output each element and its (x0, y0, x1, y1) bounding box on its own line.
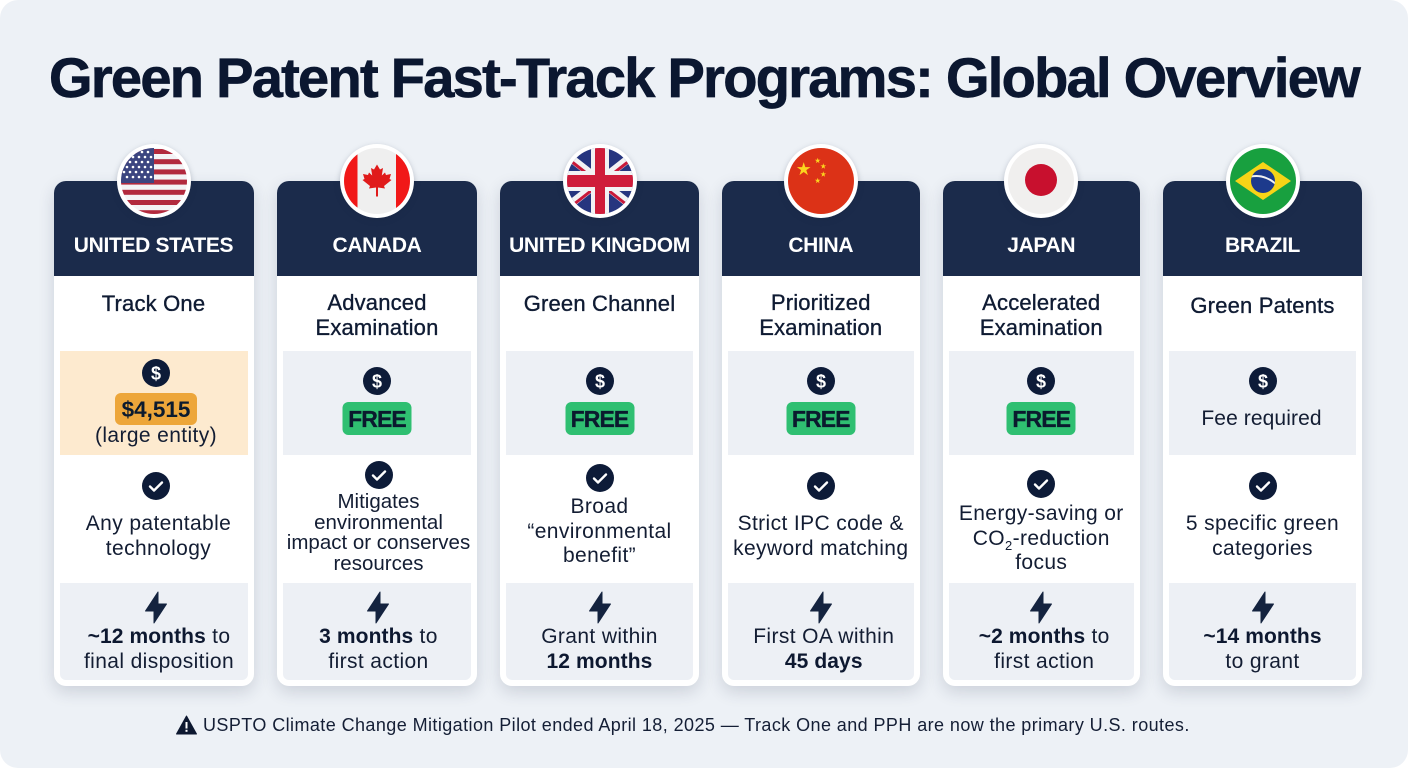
speed panel (728, 583, 914, 680)
eligibility text (1186, 512, 1339, 560)
cost badge (786, 402, 855, 435)
program name (315, 290, 439, 340)
icon: lightning bolt (810, 592, 832, 624)
cost panel (283, 351, 471, 455)
icon: lightning bolt (367, 592, 389, 624)
speed panel (1169, 583, 1356, 680)
eligibility text: “environmental (527, 520, 672, 542)
eligibility text: categories (1212, 536, 1313, 560)
cost panel (506, 351, 693, 455)
eligibility text: Mitigates (337, 490, 420, 513)
speed text: 3 months to (319, 625, 438, 648)
country name: CHINA (788, 234, 853, 257)
icon: dollar: $ (151, 364, 161, 384)
cost panel (60, 351, 248, 455)
footnote text: USPTO Climate Change Mitigation Pilot ended April 18, 2025 — Track One and PPH are now the primary U.S. routes. (203, 715, 1190, 735)
program name: Accelerated (982, 290, 1100, 314)
eligibility text: CO2-reduction (973, 526, 1110, 553)
header: brazil (1163, 181, 1362, 276)
cost note: (large entity) (95, 424, 217, 447)
icon: dollar: $ (372, 372, 382, 392)
eligibility text (86, 512, 231, 560)
icon: dollar (586, 367, 614, 395)
speed text: final disposition (84, 650, 234, 672)
icon: dollar (807, 367, 835, 395)
flag: china (781, 143, 861, 218)
eligibility text (287, 490, 470, 574)
speed text: First OA within (753, 625, 894, 648)
cost badge: FREE (1012, 406, 1070, 432)
eligibility text: environmental (314, 510, 443, 534)
cost panel (948, 351, 1134, 455)
icon: dollar (1249, 367, 1277, 395)
header: japan (942, 181, 1140, 276)
speed text (979, 625, 1110, 672)
flag: japan (1001, 143, 1081, 218)
icon: check (365, 461, 393, 489)
cost badge: $4,515 (122, 397, 190, 422)
icon: dollar (363, 367, 391, 395)
header: canada (277, 181, 477, 276)
eligibility text: keyword matching (733, 536, 908, 560)
speed text: ~2 months to (979, 625, 1110, 648)
icon: dollar: $ (594, 372, 605, 392)
header: china (722, 181, 920, 276)
program name (980, 290, 1103, 340)
eligibility text: 5 specific green (1186, 512, 1339, 535)
speed text (319, 625, 438, 672)
cost badge: FREE (348, 406, 406, 432)
flag: brazil (1223, 143, 1303, 218)
cost badge: FREE (571, 406, 628, 432)
panel: china (722, 181, 920, 686)
eligibility text (733, 512, 908, 560)
cost panel (728, 351, 914, 455)
cost panel (1169, 351, 1356, 455)
speed text: ~14 months (1203, 625, 1322, 648)
icon: lightning bolt (1252, 592, 1274, 624)
eligibility text: Energy-saving or (959, 502, 1124, 525)
speed text (1203, 625, 1322, 672)
country name: CANADA (332, 234, 422, 257)
speed panel (506, 583, 693, 680)
eligibility text (959, 502, 1124, 574)
eligibility text: technology (106, 536, 211, 560)
cost text: Fee required (1201, 407, 1322, 430)
eligibility text (527, 495, 672, 567)
icon: check (1027, 470, 1055, 498)
icon: lightning bolt (589, 592, 611, 624)
program name: Examination (315, 314, 439, 340)
icon: lightning bolt (145, 592, 167, 624)
speed text: Grant within (541, 625, 658, 648)
panel: japan (942, 181, 1140, 686)
panel: brazil (1163, 181, 1362, 686)
country name: BRAZIL (1225, 234, 1300, 257)
icon: warning (176, 716, 197, 734)
icon: check (142, 472, 170, 500)
cost badge (115, 393, 197, 425)
header: united kingdom (500, 181, 699, 276)
speed text: 45 days (785, 650, 863, 672)
icon: dollar: $ (816, 372, 826, 392)
speed text (753, 625, 894, 672)
program name: Green Channel (524, 291, 675, 316)
speed text: first action (328, 650, 429, 672)
flag: united states (114, 143, 194, 218)
icon: check (807, 472, 835, 500)
speed text (84, 625, 234, 672)
icon: dollar: $ (1036, 372, 1046, 392)
eligibility text: focus (1015, 551, 1067, 574)
speed panel (283, 583, 471, 680)
country name: JAPAN (1007, 234, 1075, 257)
program name: Track One (102, 291, 205, 316)
program name (759, 290, 882, 340)
speed text: ~12 months to (88, 625, 230, 648)
program name: Examination (759, 314, 882, 340)
icon: dollar (142, 359, 170, 387)
eligibility text: Broad (571, 495, 628, 518)
panel: canada (277, 181, 477, 686)
icon: check (586, 464, 614, 492)
panel: united states (54, 181, 254, 686)
speed text: 12 months (547, 650, 652, 672)
program name: Green Patents (1190, 293, 1335, 318)
title: Green Patent Fast-Track Programs: Global Overview (49, 46, 1359, 109)
cost badge (1007, 402, 1076, 435)
icon: check (1249, 472, 1277, 500)
country name: UNITED STATES (74, 234, 233, 257)
cost badge (565, 402, 634, 435)
icon: dollar: $ (1257, 372, 1268, 392)
cost badge: FREE (792, 406, 850, 432)
flag: united kingdom (560, 143, 640, 218)
header: united states (54, 181, 254, 276)
speed panel (948, 583, 1134, 680)
icon: lightning bolt (1030, 592, 1052, 624)
speed panel (60, 583, 248, 680)
eligibility text: impact or conserves (287, 531, 470, 554)
eligibility text: Any patentable (86, 512, 231, 535)
cost badge (342, 402, 412, 435)
eligibility text: Strict IPC code & (738, 512, 904, 535)
program name: Advanced (327, 290, 427, 314)
program name: Prioritized (771, 290, 871, 314)
footnote (176, 715, 1190, 735)
speed text (541, 625, 658, 672)
speed text: to grant (1225, 650, 1300, 672)
icon: dollar (1027, 367, 1055, 395)
eligibility text: benefit” (563, 544, 636, 567)
panel: united kingdom (500, 181, 699, 686)
speed text: first action (994, 650, 1094, 672)
eligibility text: resources (333, 552, 424, 574)
program name: Examination (980, 314, 1103, 340)
country name: UNITED KINGDOM (509, 234, 690, 257)
flag: canada (337, 143, 417, 218)
